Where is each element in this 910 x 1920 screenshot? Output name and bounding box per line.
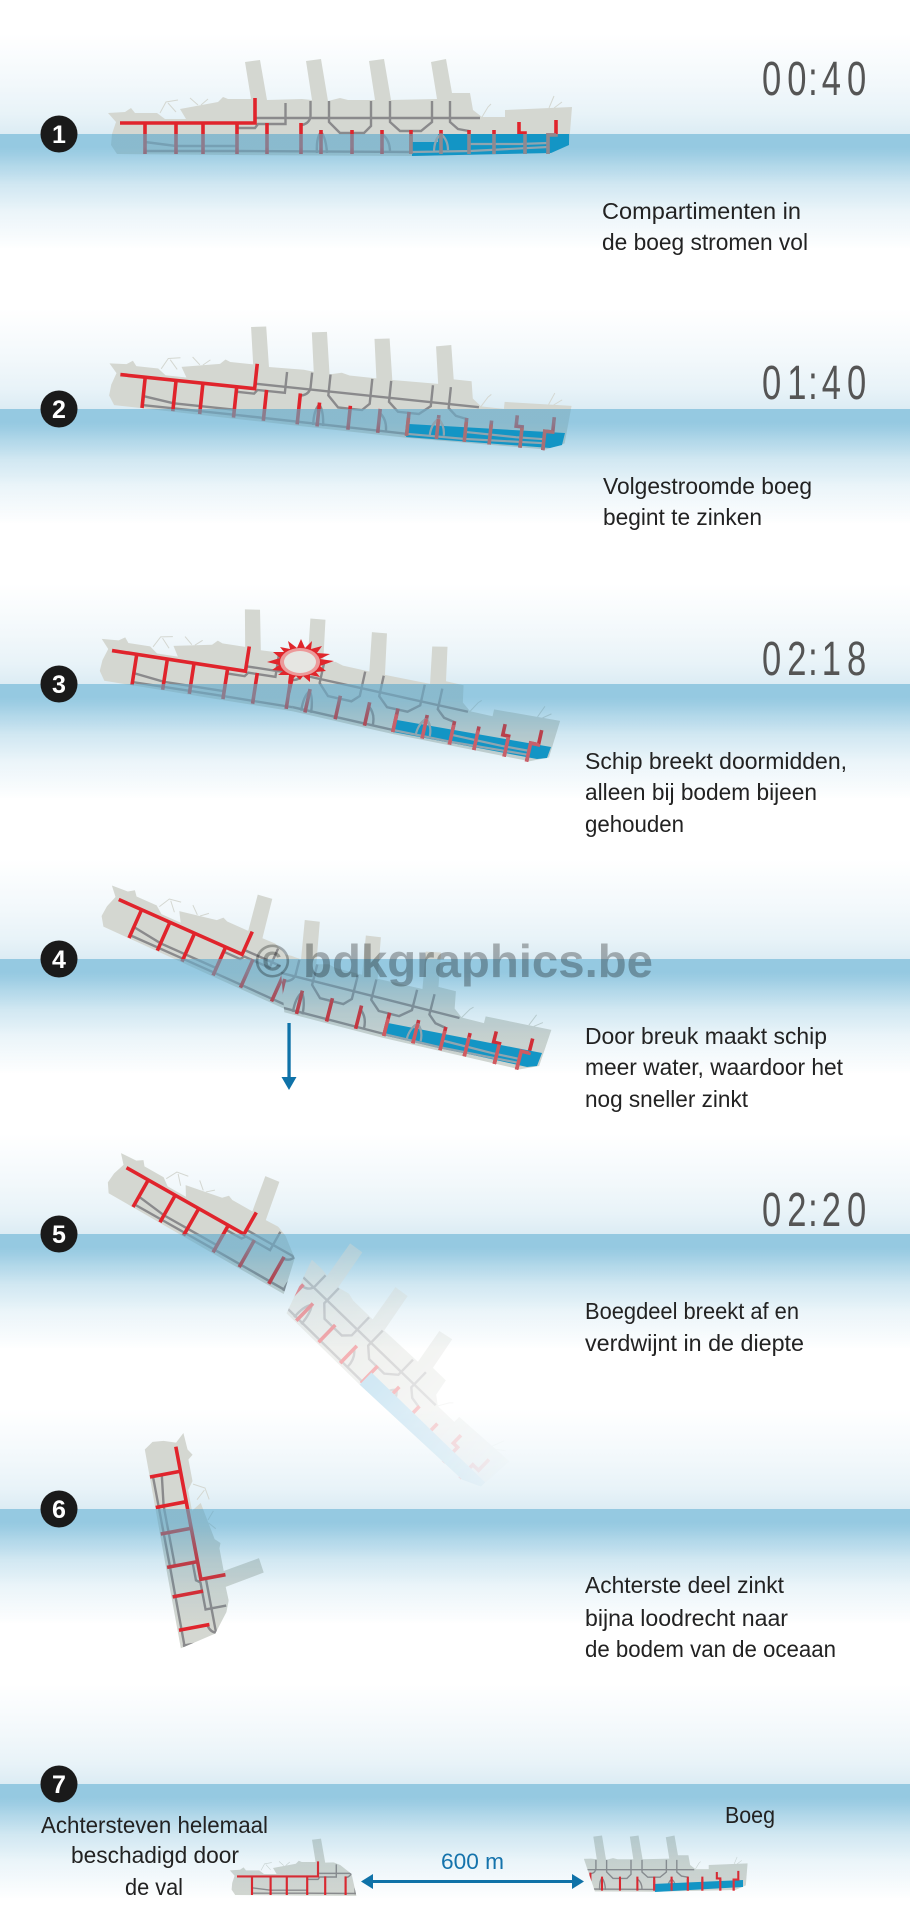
caption 4 — [585, 1023, 844, 1112]
panel 4: broken ship takes on more water — [0, 836, 910, 1114]
flooded bow 3 — [393, 712, 551, 763]
ship 7 bow wreck — [478, 1835, 748, 1892]
distance label: 600 m — [441, 1849, 504, 1874]
panel 1: compartments flood — [0, 51, 910, 255]
caption: stern: de val — [125, 1874, 183, 1900]
badge 7: 7 — [52, 1771, 66, 1799]
explosion at break — [267, 639, 334, 683]
caption 1: Compartimenten in — [602, 198, 801, 224]
badge 6 — [40, 1490, 78, 1528]
caption 2 — [603, 473, 812, 530]
water band 6 — [0, 1509, 910, 1624]
caption 1 — [602, 198, 808, 255]
ship 6 stern vertical — [141, 1423, 323, 1897]
panel 5: bow part breaks off — [0, 1153, 910, 1484]
caption 4: Door breuk maakt schip — [585, 1023, 827, 1049]
watermark: © bdkgraphics.be — [255, 935, 653, 987]
water band 4 — [0, 959, 910, 1074]
caption: bow: Boeg — [725, 1802, 775, 1828]
water band 3 — [0, 684, 910, 799]
clock 01:40: 01:40 — [762, 355, 866, 409]
caption 3 — [585, 748, 847, 837]
ship 7 stern wreck — [230, 1838, 508, 1896]
caption 6: Achterste deel zinkt — [585, 1572, 785, 1598]
caption 5 — [585, 1298, 804, 1356]
arrow: sinking direction — [282, 1023, 296, 1090]
ship 4 stern section — [94, 836, 558, 1114]
flooded bow 2 — [406, 416, 565, 451]
badge 1: 1 — [52, 121, 66, 149]
caption 6: de bodem van de oceaan — [585, 1636, 836, 1662]
clock 02:18: 02:18 — [762, 631, 866, 685]
caption 5: Boegdeel breekt af en — [585, 1298, 799, 1324]
flooded bow 7 — [653, 1879, 743, 1892]
clock 00:40: 00:40 — [762, 51, 866, 105]
water band 5 — [0, 1234, 910, 1349]
water band 2 — [0, 409, 910, 524]
badge 3 — [40, 666, 78, 702]
badge 3: 3 — [52, 671, 66, 699]
caption 3: gehouden — [585, 811, 684, 837]
caption 1: de boeg stromen vol — [602, 229, 808, 255]
badge 5 — [40, 1216, 78, 1252]
ship 3 bow section — [97, 574, 571, 769]
caption 6 — [585, 1572, 836, 1662]
badge 4: 4 — [52, 946, 66, 974]
clock 02:20: 02:20 — [762, 1182, 866, 1236]
ship 5 bow section fading — [286, 1244, 490, 1484]
ship 3 stern section — [95, 585, 569, 752]
flooded bow 4 — [383, 1017, 542, 1072]
arrow: distance 600 m — [361, 1874, 584, 1889]
caption 3: alleen bij bodem bijeen — [585, 779, 817, 805]
panel 3: ship breaks in the middle — [0, 574, 910, 837]
badge 4 — [40, 940, 78, 978]
caption: stern: Achtersteven helemaal — [41, 1812, 268, 1838]
badge 2 — [40, 390, 78, 428]
panel 2: bow begins to sink — [0, 310, 910, 530]
badge 2: 2 — [52, 396, 66, 424]
water band 1 — [0, 134, 910, 249]
ship 1 level — [108, 59, 572, 156]
panel 7: wreck on the ocean floor — [0, 1766, 910, 1900]
caption 2: Volgestroomde boeg — [603, 473, 812, 499]
ship 5 stern section — [100, 1106, 551, 1419]
badge 7 — [40, 1766, 78, 1802]
caption 2: begint te zinken — [603, 504, 762, 530]
caption: stern: beschadigd door — [71, 1842, 239, 1868]
caption 3: Schip breekt doormidden, — [585, 748, 847, 774]
ship 4 bow section — [90, 870, 563, 1077]
badge 5: 5 — [52, 1221, 66, 1249]
caption 4: nog sneller zinkt — [585, 1086, 749, 1112]
caption 6: bijna loodrecht naar — [585, 1605, 788, 1631]
caption 4: meer water, waardoor het — [585, 1054, 844, 1080]
caption: stern — [41, 1812, 268, 1900]
badge 6: 6 — [52, 1496, 66, 1524]
caption 5: verdwijnt in de diepte — [585, 1330, 804, 1356]
ship 2 tilted — [105, 310, 577, 455]
badge 1 — [40, 116, 78, 152]
water band 7 — [0, 1784, 910, 1899]
panel 6: stern sinks almost vertically — [0, 1423, 910, 1897]
flooded bow 1 — [411, 134, 569, 156]
